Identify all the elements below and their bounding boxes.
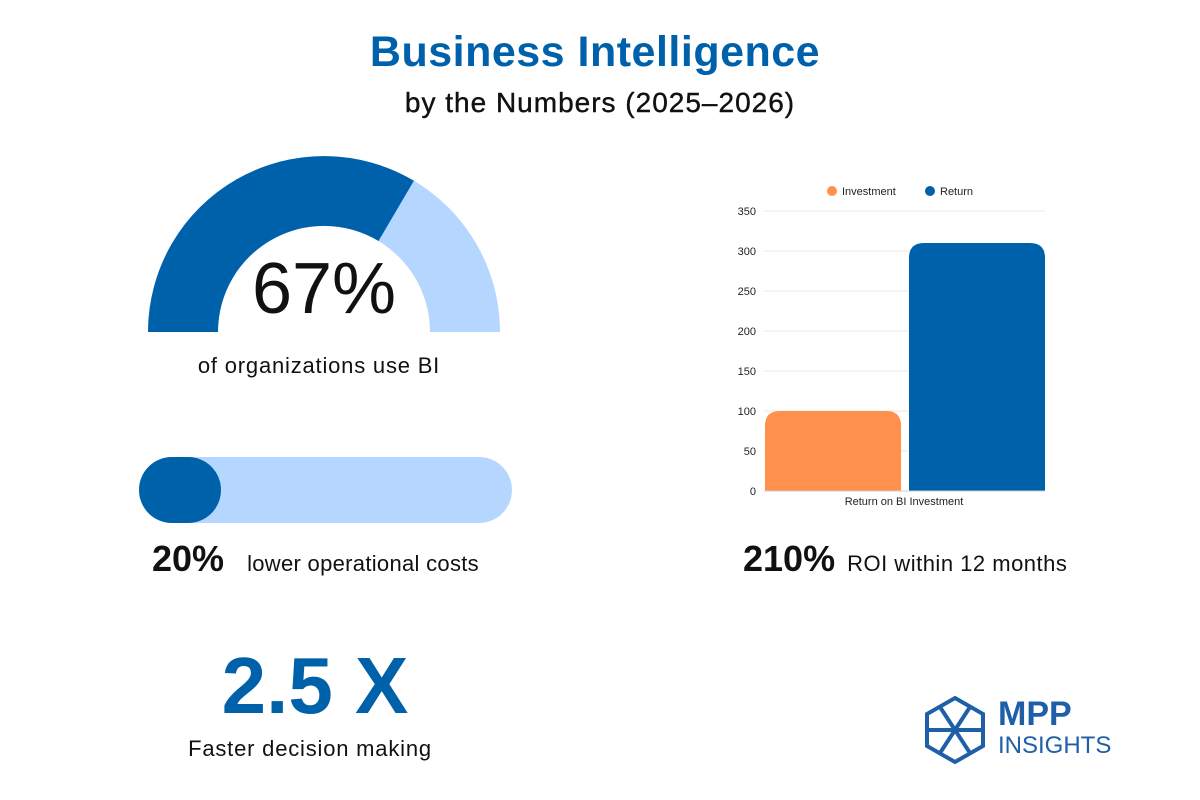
progress bar bbox=[139, 457, 512, 523]
bar chart: 350 bbox=[738, 206, 756, 218]
bar chart: 200 bbox=[738, 326, 756, 338]
gauge value: 67% bbox=[252, 249, 396, 329]
legend bbox=[827, 186, 973, 198]
gauge chart bbox=[148, 156, 500, 332]
bar chart: 250 bbox=[738, 286, 756, 298]
logo icon bbox=[925, 696, 985, 764]
stat caption: Faster decision making bbox=[188, 736, 432, 761]
stat: 2.5x: 2.5 X bbox=[222, 641, 408, 730]
bar chart: 300 bbox=[738, 246, 756, 258]
logo bbox=[925, 695, 1111, 764]
stat: lower costs: 20% lower operational costs bbox=[152, 538, 479, 579]
stat: ROI: 210% ROI within 12 months bbox=[743, 538, 1067, 579]
bar: investment bbox=[765, 411, 901, 491]
subtitle: by the Numbers (2025–2026) bbox=[405, 87, 795, 118]
bar chart bbox=[738, 186, 1045, 508]
logo: INSIGHTS bbox=[998, 732, 1111, 759]
title: Business Intelligence bbox=[370, 28, 820, 76]
gauge caption: of organizations use BI bbox=[198, 353, 440, 378]
bar: return bbox=[909, 243, 1045, 491]
legend: Investment bbox=[842, 186, 896, 198]
logo text: MPP bbox=[998, 695, 1072, 733]
legend: Return bbox=[940, 186, 973, 198]
bar chart: 0 bbox=[750, 486, 756, 498]
bar chart: Return on BI Investment bbox=[845, 496, 963, 508]
bar chart: 150 bbox=[738, 366, 756, 378]
bar chart: 50 bbox=[744, 446, 756, 458]
bar chart: 100 bbox=[738, 406, 756, 418]
